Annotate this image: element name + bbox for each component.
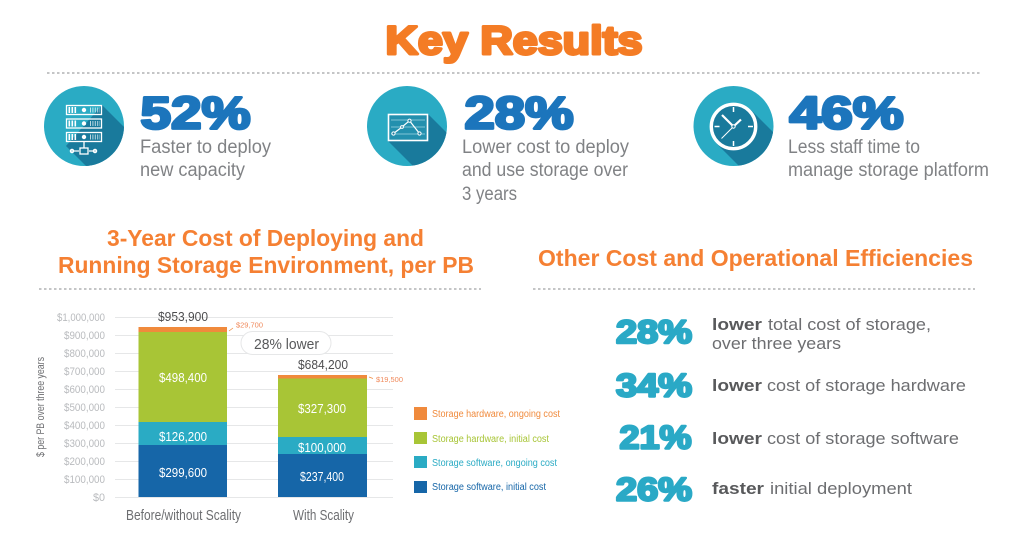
x axis labels: With Scality: [293, 508, 355, 524]
stat description: and use storage over: [462, 160, 629, 181]
item: 28%: 28%: [616, 314, 692, 350]
bar: before/without Scality: $299,600: [159, 466, 207, 480]
item: 34%: [616, 368, 966, 404]
item: 21%: 21%: [620, 420, 692, 456]
item: 21%: cost of storage software: [767, 429, 959, 448]
stat description: Faster to deploy: [140, 137, 271, 158]
small orange callouts: [229, 320, 403, 384]
stat description: manage storage platform: [788, 160, 989, 181]
item: 34%: 34%: [616, 368, 692, 404]
bar chart: [35, 310, 403, 524]
callout: 28% lower: 28% lower: [254, 337, 319, 353]
y axis labels: $200,000: [64, 456, 105, 468]
legend: Storage software, initial cost: [432, 482, 546, 493]
y axis labels: $400,000: [64, 420, 105, 432]
y axis labels: $900,000: [64, 330, 105, 342]
legend: Storage software, ongoing cost: [432, 458, 557, 469]
stat description: 3 years: [462, 184, 517, 205]
bar totals: $953,900: [158, 310, 208, 324]
bar: with Scality: $237,400: [300, 470, 344, 484]
stat number: 46%: [790, 88, 904, 138]
bar: before/without Scality: $126,200: [159, 430, 207, 444]
x axis labels: [126, 508, 355, 524]
bar totals: $684,200: [298, 358, 348, 372]
stat description: Less staff time to: [788, 137, 920, 158]
item: 28%: over three years: [712, 334, 841, 353]
item: 21%: lower: [712, 429, 762, 448]
item: 26%: faster: [712, 479, 764, 498]
y axis labels: $500,000: [64, 402, 105, 414]
item: 26%: 26%: [616, 472, 692, 508]
stat description: Lower cost to deploy: [462, 137, 629, 158]
item: 28%: [616, 314, 931, 353]
panel: stat 52%: [44, 86, 271, 186]
panel: efficiencies list: [616, 314, 966, 508]
y axis labels: $100,000: [64, 474, 105, 486]
icon: clock: [694, 86, 774, 166]
item: 28%: total cost of storage,: [768, 315, 931, 334]
bar: before/without Scality: $498,400: [159, 371, 207, 385]
y axis labels: $0: [93, 492, 105, 504]
bar: with Scality: $100,000: [298, 441, 346, 455]
y axis labels: [57, 312, 105, 504]
icon: server rack: [44, 86, 124, 166]
y axis labels: $700,000: [64, 366, 105, 378]
x axis labels: Before/without Scality: [126, 508, 242, 524]
callout: 28% lower: [241, 332, 331, 354]
panel: stat 28%: [367, 86, 629, 205]
heading: other efficiencies: Other Cost and Operational Efficiencies: [538, 245, 973, 271]
bar totals: [158, 310, 348, 372]
item: 28%: lower: [712, 315, 762, 334]
stat number: 52%: [140, 88, 250, 138]
panel: stat 46%: [694, 86, 989, 184]
stat number: 28%: [464, 88, 574, 138]
y axis title: $ per PB over three years: [35, 357, 47, 457]
title: Key Results: [386, 19, 642, 63]
heading: cost chart: Running Storage Environment, per PB: [58, 252, 474, 278]
icon: line chart: [367, 86, 447, 166]
y axis labels: $800,000: [64, 348, 105, 360]
item: 21%: [620, 420, 959, 456]
item: 34%: lower: [712, 376, 762, 395]
bar: with Scality: $327,300: [298, 402, 346, 416]
item: 26%: initial deployment: [770, 479, 912, 498]
bar: with Scality: [278, 375, 367, 497]
small orange callouts: $29,700: [236, 320, 263, 330]
legend: [414, 407, 560, 493]
bar: before/without Scality: [138, 327, 227, 497]
legend: Storage hardware, initial cost: [432, 434, 549, 445]
item: 34%: cost of storage hardware: [767, 376, 966, 395]
heading: cost chart: 3-Year Cost of Deploying and: [107, 225, 424, 251]
small orange callouts: $19,500: [376, 375, 403, 384]
item: 26%: [616, 472, 912, 508]
y axis labels: $1,000,000: [57, 312, 105, 324]
y axis labels: $300,000: [64, 438, 105, 450]
legend: Storage hardware, ongoing cost: [432, 409, 560, 420]
y axis labels: $600,000: [64, 384, 105, 396]
stat description: new capacity: [140, 160, 245, 181]
